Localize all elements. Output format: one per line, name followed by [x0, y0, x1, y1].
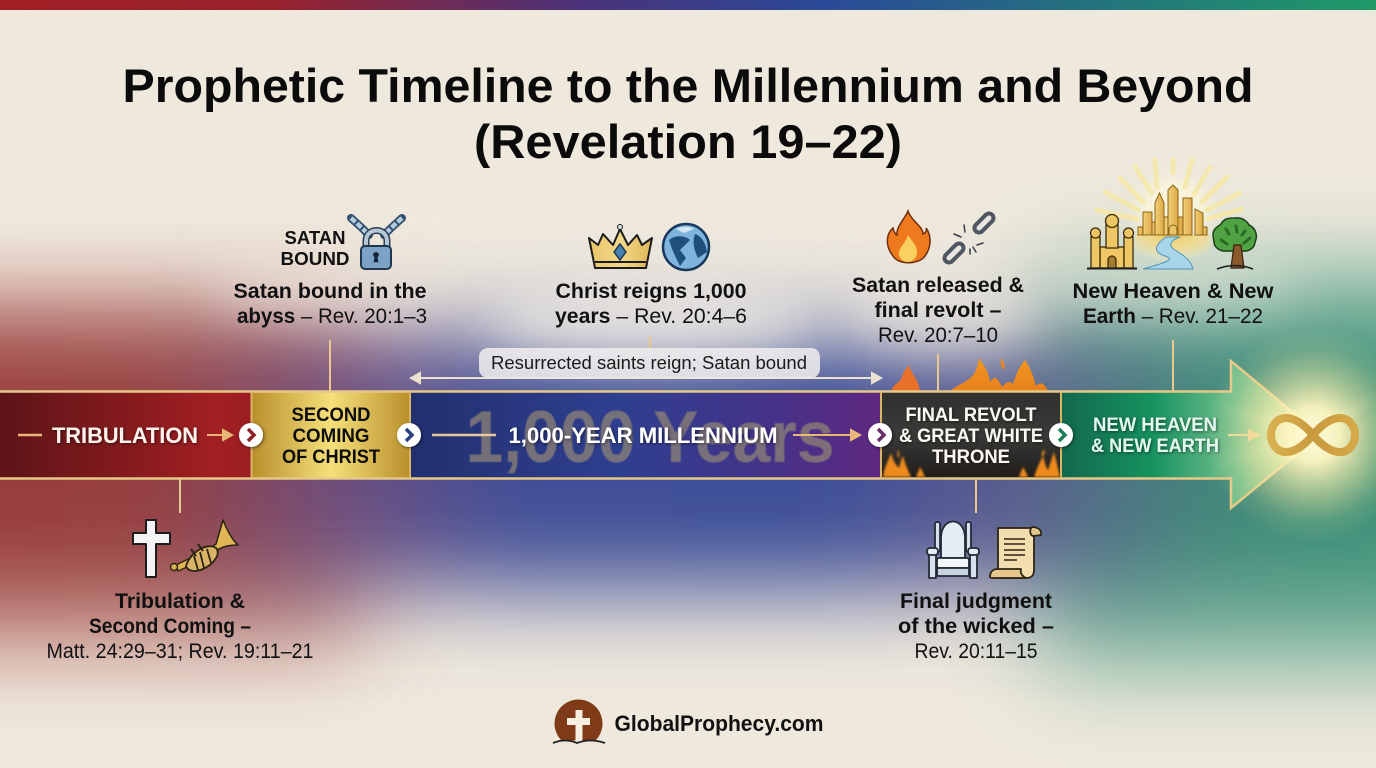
segment label: final revolt — [899, 405, 1043, 468]
new heaven reference — [1072, 280, 1274, 328]
flames inside dark segment — [883, 449, 1060, 477]
christ reigns reference — [555, 280, 747, 328]
ghost label: 1,000 Years: 1,000 Years — [466, 397, 834, 478]
icon: throne — [927, 522, 979, 578]
band: final revolt segment — [881, 392, 1061, 478]
callout pill: Resurrected saints reign; Satan bound — [491, 353, 807, 373]
icon: brand logo — [553, 700, 605, 748]
icon: globe — [663, 224, 709, 270]
satan bound caption: SATAN — [284, 228, 346, 248]
sun halo — [1137, 179, 1209, 251]
title — [122, 59, 1254, 168]
icon: broken chain — [949, 218, 989, 258]
christ reigns reference: Christ reigns 1,000 — [556, 280, 746, 303]
satan released reference: Rev. 20:7–10 — [878, 324, 998, 347]
chevron node: blue to dark — [868, 423, 892, 447]
icon: radiating sun — [1097, 160, 1242, 219]
satan released reference — [852, 274, 1024, 347]
double arrow: millennium span — [411, 373, 881, 383]
label: christ reigns — [555, 224, 747, 328]
satan bound reference: abyss – Rev. 20:1–3 — [237, 305, 427, 328]
icon: castle — [1087, 214, 1137, 268]
icon: tree — [1213, 218, 1256, 269]
band: tribulation segment — [0, 392, 251, 478]
satan bound caption: BOUND — [280, 249, 350, 269]
title: Prophetic Timeline to the Millennium and Beyond — [122, 59, 1254, 112]
segment label: second coming: OF CHRIST — [282, 447, 380, 468]
christ reigns reference: years – Rev. 20:4–6 — [555, 305, 747, 328]
new heaven reference: New Heaven & New — [1072, 280, 1274, 303]
segment label: new heaven: NEW HEAVEN — [1093, 415, 1217, 436]
final judgment reference — [898, 590, 1054, 663]
small arrow to infinity — [1228, 430, 1259, 440]
colour glow behind timeline — [0, 255, 1376, 670]
segment label: final revolt: FINAL REVOLT — [906, 405, 1037, 426]
footer brand — [553, 700, 824, 748]
icon: scroll — [990, 527, 1041, 578]
chevron node: red to gold — [239, 423, 263, 447]
icon: cross — [133, 520, 170, 577]
icon: flame — [887, 211, 930, 263]
connector lines — [180, 336, 1173, 513]
segment label: millennium — [432, 423, 860, 448]
chevron node: gold to blue — [397, 423, 421, 447]
band outlines — [0, 361, 1320, 508]
satan bound caption — [280, 228, 350, 269]
icon: golden ground — [1135, 235, 1210, 269]
tribulation reference: Second Coming – — [89, 615, 251, 638]
satan released reference: final revolt – — [874, 299, 1002, 322]
segment label: tribulation — [18, 423, 232, 448]
segment label: millennium: 1,000-YEAR MILLENNIUM — [508, 423, 778, 448]
icon: infinity — [1271, 418, 1355, 452]
segment label: tribulation: TRIBULATION — [52, 423, 198, 448]
segment label: new heaven — [1091, 415, 1219, 457]
segment label: second coming: COMING — [292, 426, 370, 447]
segment label: final revolt: & GREAT WHITE — [899, 426, 1043, 447]
final judgment reference: Rev. 20:11–15 — [914, 640, 1038, 663]
label: tribulation and second coming — [46, 520, 314, 663]
final judgment reference: of the wicked – — [898, 615, 1054, 638]
icon: crown — [589, 224, 652, 268]
band: second coming segment — [252, 392, 410, 478]
band: new heaven arrow — [1061, 361, 1320, 508]
tribulation reference: Matt. 24:29–31; Rev. 19:11–21 — [46, 640, 314, 663]
final judgment reference: Final judgment — [900, 590, 1052, 613]
label: final judgment — [898, 522, 1054, 663]
segment label: final revolt: THRONE — [932, 447, 1010, 468]
timeline arrow band — [0, 361, 1320, 508]
tribulation reference: Tribulation & — [115, 590, 245, 613]
satan bound reference — [234, 280, 427, 328]
band: millennium segment — [410, 392, 881, 478]
top colour bar — [0, 0, 1376, 10]
segment label: second coming: SECOND — [292, 405, 370, 426]
new heaven reference: Earth – Rev. 21–22 — [1083, 305, 1263, 328]
icon: padlock with chains — [351, 218, 402, 269]
label: satan bound — [234, 218, 427, 328]
icon: river — [1143, 237, 1193, 269]
segment label: new heaven: & NEW EARTH — [1091, 436, 1219, 457]
callout pill — [479, 348, 820, 378]
flames above final revolt segment — [891, 358, 1048, 391]
label: new heaven and new earth — [1072, 160, 1274, 328]
sun glow at arrow tip — [1205, 327, 1376, 543]
satan bound reference: Satan bound in the — [234, 280, 426, 303]
satan released reference: Satan released & — [852, 274, 1024, 297]
segment label: second coming — [282, 405, 380, 468]
icon: trumpet — [170, 520, 238, 571]
chevron node: dark to green — [1049, 423, 1073, 447]
brand name: GlobalProphecy.com — [614, 711, 824, 736]
label: satan released — [852, 211, 1024, 347]
title: (Revelation 19–22) — [474, 115, 902, 168]
tribulation reference — [46, 590, 314, 663]
icon: golden city — [1138, 185, 1207, 235]
